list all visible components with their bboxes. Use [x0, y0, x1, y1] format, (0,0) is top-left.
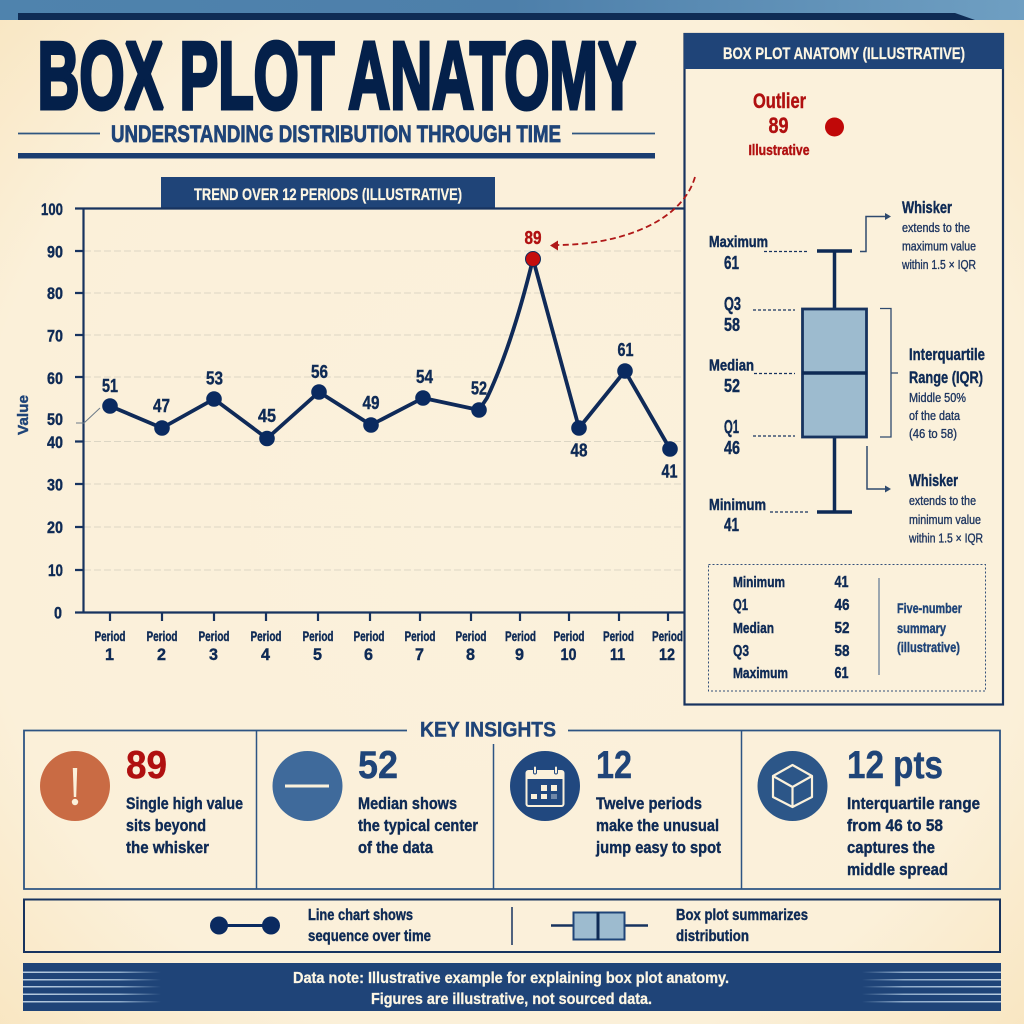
- upper whisker callout: extends to the: [902, 220, 970, 235]
- box plot value labels: Q3: [724, 294, 741, 314]
- x axis labels: 10: [560, 645, 576, 664]
- line chart key text: sequence over time: [308, 928, 431, 945]
- five-number summary: 41: [834, 574, 849, 591]
- box plot value labels: 52: [724, 376, 740, 396]
- x axis labels: 2: [157, 645, 166, 664]
- y axis label: Value: [15, 395, 32, 435]
- data labels: 61: [618, 340, 634, 360]
- five-number summary: Minimum: [733, 574, 785, 591]
- panel: line chart: [15, 177, 684, 664]
- y axis: 40: [47, 433, 63, 452]
- lower whisker callout: extends to the: [909, 493, 976, 508]
- box plot value labels: 58: [724, 315, 740, 335]
- outlier label: [748, 90, 810, 159]
- line chart key text: Line chart shows: [308, 907, 413, 924]
- IQR callout: Interquartile: [909, 345, 985, 364]
- data labels: 49: [362, 393, 380, 413]
- x axis labels: Period: [554, 629, 584, 644]
- five-number summary: (illustrative): [897, 639, 960, 655]
- outlier label: Illustrative: [748, 142, 810, 159]
- insight: outlier: sits beyond: [126, 816, 206, 835]
- x axis labels: 1: [105, 645, 114, 664]
- upper whisker callout: [860, 198, 976, 272]
- x axis labels: Period: [354, 629, 384, 644]
- insight: median: of the data: [358, 838, 433, 857]
- five-number summary: Median: [733, 620, 774, 637]
- IQR callout: Middle 50%: [909, 390, 966, 405]
- outlier point: [825, 118, 844, 136]
- data labels: 48: [570, 440, 588, 460]
- insight: periods: make the unusual: [596, 816, 719, 835]
- x axis labels: 9: [515, 645, 524, 664]
- insight: interquartile range: from 46 to 58: [847, 816, 943, 835]
- key insights heading: KEY INSIGHTS: [420, 718, 556, 742]
- box plot value labels: 46: [724, 438, 740, 458]
- panel: box plot anatomy: [684, 33, 1004, 704]
- lower whisker callout: [867, 446, 983, 546]
- upper whisker callout: within 1.5 × IQR: [901, 257, 976, 272]
- data labels: 51: [102, 376, 118, 396]
- five-number summary: Five-number: [897, 600, 962, 616]
- box plot value labels: Maximum: [709, 234, 768, 251]
- insight: interquartile range: 12 pts: [847, 744, 943, 787]
- insight: median: Median shows: [358, 794, 457, 813]
- five-number summary: 46: [834, 597, 850, 614]
- insight: outlier: [40, 744, 243, 857]
- title: BOX PLOT ANATOMY: [38, 22, 636, 130]
- icon: cube: [758, 751, 828, 821]
- lower whisker callout: Whisker: [909, 471, 958, 490]
- y axis: 0: [54, 604, 62, 622]
- outlier label: Outlier: [753, 90, 806, 113]
- insight: median: 52: [358, 744, 398, 787]
- insight: periods: Twelve periods: [596, 794, 702, 813]
- x axis labels: Period: [94, 629, 126, 644]
- y axis: 80: [47, 284, 63, 303]
- five-number summary: Maximum: [733, 665, 788, 682]
- insight: interquartile range: [758, 744, 980, 879]
- x axis labels: 4: [261, 645, 271, 664]
- icon: exclamation: [40, 751, 110, 821]
- insight: periods: 12: [596, 744, 632, 787]
- IQR callout: (46 to 58): [909, 426, 957, 441]
- x axis labels: 5: [313, 645, 322, 664]
- legend: [24, 900, 1000, 952]
- box plot key text: [676, 907, 808, 945]
- five-number summary: 52: [834, 620, 850, 637]
- data labels: [102, 228, 678, 482]
- x axis labels: 12: [659, 645, 675, 664]
- subtitle: [18, 121, 655, 158]
- box plot value labels: 41: [724, 515, 739, 535]
- chart heading tab: TREND OVER 12 PERIODS (ILLUSTRATIVE): [194, 185, 462, 204]
- x axis labels: Period: [198, 629, 230, 644]
- data labels: 52: [471, 378, 487, 398]
- insight: outlier: Single high value: [126, 794, 243, 813]
- x axis labels: Period: [250, 629, 282, 644]
- box plot value labels: Q1: [724, 417, 739, 437]
- y axis: [41, 200, 684, 622]
- x axis labels: 8: [466, 645, 475, 664]
- panel heading: [684, 33, 1004, 69]
- y axis: 60: [47, 369, 63, 388]
- box plot key text: distribution: [676, 928, 749, 945]
- top banner: [0, 0, 1024, 20]
- box plot value labels: 61: [724, 253, 739, 273]
- chart heading tab: [161, 177, 495, 209]
- footer data note: Data note: Illustrative example for explaining box plot anatomy.: [293, 970, 729, 987]
- y axis: 90: [47, 242, 63, 262]
- footer data note: Figures are illustrative, not sourced data.: [371, 991, 652, 1008]
- five-number summary: Q1: [733, 597, 748, 614]
- upper whisker callout: Whisker: [902, 198, 952, 217]
- outlier label: 89: [768, 113, 788, 138]
- x axis labels: Period: [302, 629, 334, 644]
- y axis: 30: [47, 476, 63, 494]
- five-number summary: summary: [897, 620, 946, 636]
- insight: periods: jump easy to spot: [595, 838, 721, 857]
- x axis labels: 11: [610, 645, 625, 664]
- lower whisker callout: within 1.5 × IQR: [908, 530, 983, 546]
- x axis labels: Period: [505, 629, 536, 644]
- arrow: outlier callout: [550, 177, 695, 250]
- icon: minus: [272, 751, 342, 821]
- icon: line chart key: [210, 916, 280, 934]
- data labels: 45: [258, 406, 276, 426]
- x axis labels: 6: [364, 645, 373, 664]
- data labels: 89: [524, 228, 542, 248]
- insight: outlier: 89: [126, 744, 167, 787]
- insight: outlier: the whisker: [126, 838, 209, 857]
- box plot: [802, 251, 867, 512]
- icon: calendar: [510, 751, 580, 821]
- insight: periods: [510, 744, 721, 857]
- five-number summary: Q3: [733, 643, 749, 660]
- y axis: 10: [48, 561, 63, 580]
- x axis labels: Period: [456, 629, 486, 644]
- data labels: 41: [662, 462, 678, 482]
- five-number summary: 61: [834, 665, 849, 682]
- x axis labels: Period: [652, 629, 683, 644]
- panel: key insights: [24, 718, 1000, 889]
- x axis labels: 3: [209, 645, 218, 664]
- box plot key text: Box plot summarizes: [676, 907, 808, 924]
- IQR callout: of the data: [909, 408, 961, 423]
- line chart key text: [308, 907, 431, 945]
- insight: median: the typical center: [358, 816, 478, 835]
- x axis labels: Period: [404, 629, 436, 644]
- data labels: 53: [206, 368, 223, 388]
- data line: [102, 252, 678, 457]
- five-number summary: [708, 564, 986, 691]
- x axis labels: 7: [415, 645, 424, 664]
- data labels: 47: [153, 396, 170, 416]
- five-number summary: 58: [834, 643, 850, 660]
- x axis labels: [94, 612, 683, 664]
- box plot value labels: [709, 234, 808, 535]
- y axis: 20: [47, 518, 63, 537]
- box plot value labels: Median: [709, 358, 754, 374]
- x axis labels: Period: [603, 629, 634, 644]
- insight: interquartile range: middle spread: [847, 860, 948, 879]
- IQR callout: [880, 308, 985, 441]
- data labels: 56: [311, 362, 328, 382]
- box plot value labels: Minimum: [709, 497, 766, 514]
- insight: interquartile range: Interquartile range: [847, 794, 980, 813]
- IQR callout: Range (IQR): [909, 368, 983, 387]
- data labels: 54: [416, 367, 433, 387]
- lower whisker callout: minimum value: [909, 512, 981, 527]
- y axis: 70: [47, 326, 63, 346]
- subtitle: UNDERSTANDING DISTRIBUTION THROUGH TIME: [111, 121, 561, 148]
- insight: median: [272, 744, 478, 857]
- y axis: 50: [47, 410, 63, 429]
- insight: interquartile range: captures the: [847, 838, 935, 857]
- upper whisker callout: maximum value: [902, 238, 976, 254]
- y axis: 100: [41, 200, 63, 219]
- x axis labels: Period: [146, 629, 178, 644]
- footer data note: [23, 963, 1001, 1011]
- icon: box plot key: [551, 912, 648, 940]
